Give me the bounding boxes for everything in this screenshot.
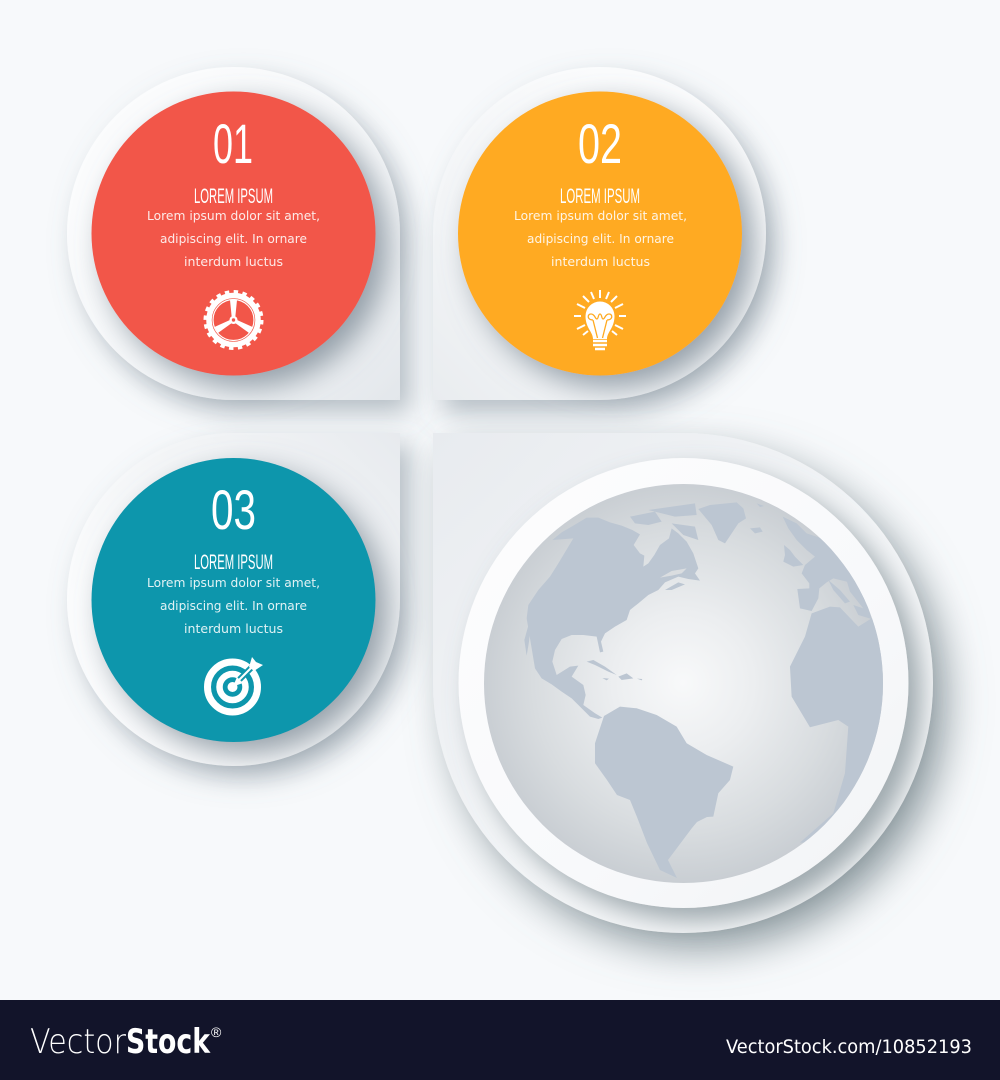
Cuba <box>587 660 617 675</box>
logo: VectorStock: Vector <box>30 1022 126 1062</box>
logo: VectorStock: Stock <box>126 1022 211 1062</box>
orange circle <box>458 92 742 376</box>
panel 01: red teardrop card <box>67 67 400 400</box>
body text 03 <box>147 576 320 636</box>
Europe and Greenland <box>698 502 877 619</box>
panel 04: globe card <box>433 433 933 933</box>
number 01: 01 <box>213 112 253 175</box>
logo: VectorStock <box>30 1022 222 1062</box>
Iceland <box>750 503 764 533</box>
body text 01: interdum luctus <box>184 255 283 269</box>
number 03: 03 <box>211 478 256 541</box>
icon: target with arrow <box>208 657 263 712</box>
body text 02: interdum luctus <box>551 255 650 269</box>
Arctic islands <box>630 503 698 540</box>
Hispaniola and nearby islands <box>602 673 642 680</box>
heading 02: LOREM IPSUM <box>560 185 640 208</box>
body text 01: adipiscing elit. In ornare <box>160 232 307 246</box>
ocean sphere <box>484 484 884 884</box>
teardrop backing 01 <box>67 67 400 400</box>
body text 03: adipiscing elit. In ornare <box>160 599 307 613</box>
footer bar <box>0 1000 1000 1080</box>
body text 02: adipiscing elit. In ornare <box>527 232 674 246</box>
red circle <box>92 92 376 376</box>
panel 03: teal teardrop card <box>67 433 400 766</box>
Greenland <box>698 502 746 543</box>
body text 01: Lorem ipsum dolor sit amet, <box>147 209 320 223</box>
heading 03: LOREM IPSUM <box>194 551 273 574</box>
teal circle <box>92 458 376 742</box>
mainland Europe and Scandinavia <box>783 517 864 611</box>
large teardrop backing <box>433 433 933 933</box>
body text 03: interdum luctus <box>184 622 283 636</box>
South America and Africa <box>595 607 900 878</box>
icon: gear <box>206 293 260 347</box>
teardrop backing 02 <box>433 67 766 400</box>
icon: light bulb <box>574 290 626 349</box>
British Isles <box>783 545 803 567</box>
panel 02: orange teardrop card <box>433 67 766 400</box>
logo: VectorStock: ® <box>211 1024 222 1040</box>
globe <box>484 484 900 884</box>
Baja California <box>524 628 530 655</box>
Africa <box>790 606 883 842</box>
teardrop backing 03 <box>67 433 400 766</box>
Balkans <box>848 583 872 618</box>
body text 02 <box>514 209 687 269</box>
footer url: VectorStock.com/10852193 <box>726 1036 972 1058</box>
South America <box>595 707 733 878</box>
Americas and polar land <box>524 503 700 719</box>
Newfoundland <box>665 582 685 590</box>
North and Central America <box>527 518 700 719</box>
body text 02: Lorem ipsum dolor sit amet, <box>514 209 687 223</box>
body text 03: Lorem ipsum dolor sit amet, <box>147 576 320 590</box>
body text 01 <box>147 209 320 269</box>
heading 01: LOREM IPSUM <box>194 185 273 208</box>
number 02: 02 <box>578 112 622 175</box>
Italy <box>828 580 850 603</box>
Gulf of St Lawrence <box>660 568 687 578</box>
white ring <box>458 458 908 908</box>
